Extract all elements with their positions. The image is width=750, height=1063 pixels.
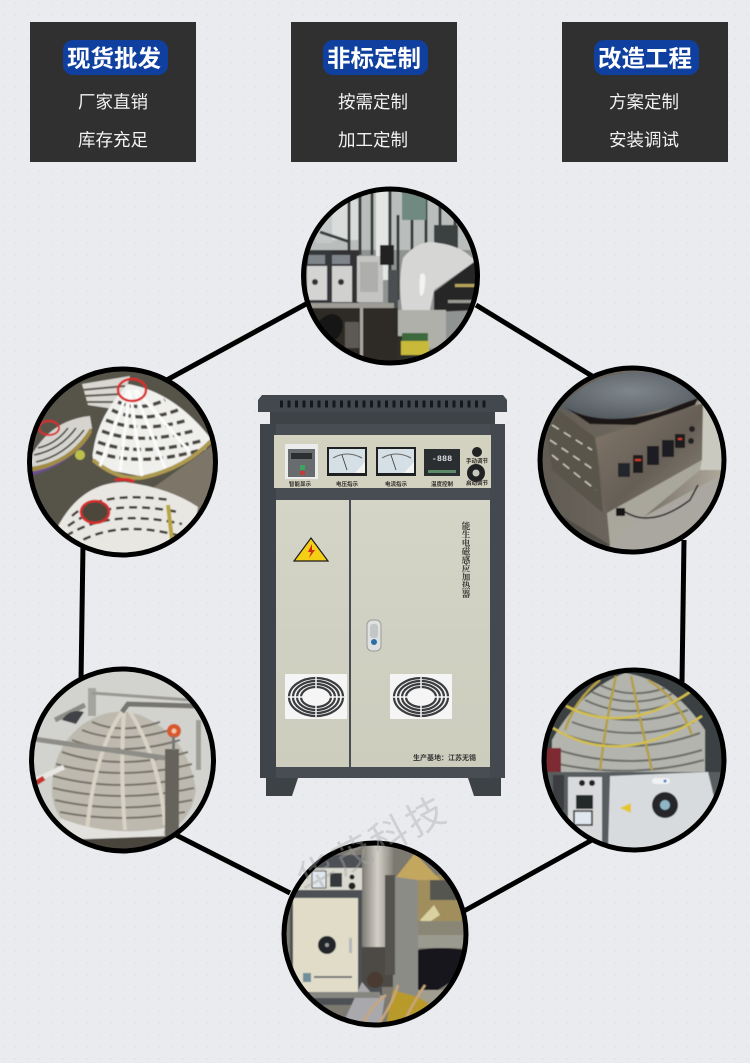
vertical product name: 应 (462, 562, 471, 574)
control panel (274, 435, 491, 488)
vertical product name: 能 (462, 520, 471, 532)
feature card: custom (291, 22, 457, 162)
wok (560, 372, 702, 420)
temperature controller: -888 (432, 454, 452, 464)
vertical product name: 器 (462, 588, 471, 600)
back dome (82, 376, 130, 410)
cabinet top cap with vents (258, 395, 507, 426)
photo circle: stainless heater box with wok (536, 366, 730, 556)
left door (276, 500, 349, 767)
voltmeter (327, 447, 367, 476)
door lock (367, 620, 381, 651)
central induction heater cabinet (258, 395, 507, 796)
hexagon connector lines (81, 304, 684, 911)
control labels: 电流指示 (385, 480, 407, 488)
control labels (289, 457, 488, 488)
cabinet (290, 855, 382, 1005)
photo circle: white coil domes (26, 368, 220, 560)
cabinet body and feet (260, 424, 505, 796)
vertical product name (462, 520, 472, 600)
dome (52, 712, 196, 838)
right door (351, 500, 490, 767)
text: 安装调试: 安装调试 (609, 130, 679, 150)
production base label: 生产基地：江苏无锡 (413, 753, 476, 762)
ammeter (376, 447, 416, 476)
box side (547, 410, 603, 513)
feature card: retrofit (562, 22, 728, 162)
vertical product name: 热 (462, 580, 472, 592)
vertical product name: 生 (462, 528, 471, 540)
vertical product name: 感 (462, 554, 471, 566)
cabinet (548, 772, 720, 844)
heading badge: 非标定制: 非标定制 (327, 46, 421, 72)
heading badge: 非标定制 (323, 40, 428, 75)
worker (367, 972, 383, 988)
control labels: 启动调节 (466, 479, 488, 487)
text: 厂家直销: 厂家直销 (78, 92, 148, 112)
dome (552, 673, 705, 772)
feature card: wholesale (30, 22, 196, 162)
temperature controller (424, 449, 460, 476)
left small dome (30, 416, 92, 470)
steel column (362, 845, 393, 947)
cabinets (306, 250, 334, 304)
watermark: 华茂科技 (291, 789, 455, 903)
main dome (93, 384, 212, 477)
knobs (467, 447, 485, 482)
heading badge: 现货批发 (63, 40, 168, 75)
vertical product name: 加 (462, 571, 471, 583)
control labels: 智能显示 (289, 480, 311, 488)
text: 库存充足: 库存充足 (78, 130, 148, 150)
front dome (56, 482, 198, 560)
photo circle: insulated coil dome on steel frame (28, 668, 218, 855)
control labels: 温度控制 (431, 480, 453, 488)
vertical product name: 磁 (462, 546, 471, 558)
steel frame (34, 739, 165, 758)
hood (400, 242, 474, 310)
box front (595, 403, 703, 513)
text: 按需定制: 按需定制 (338, 92, 408, 112)
warning triangle icon (294, 538, 328, 561)
photo circle: factory installation (300, 185, 482, 368)
yellow base (386, 990, 428, 1022)
heading badge: 改造工程 (594, 40, 699, 75)
heading badge: 现货批发: 现货批发 (67, 46, 161, 72)
photo circle: yellow-banded dome with control cabinet (540, 668, 735, 852)
digital controller (285, 444, 318, 479)
fan grille left (285, 674, 347, 719)
control labels: 电压指示 (336, 480, 358, 488)
text: 加工定制: 加工定制 (338, 130, 408, 150)
right panel (393, 877, 418, 997)
photo circle: cabinet beside reactor with worker (282, 840, 470, 1030)
text: 方案定制: 方案定制 (609, 92, 679, 112)
fan grille right (390, 674, 452, 719)
control labels: 手动调节 (466, 457, 488, 465)
vertical product name: 电 (462, 537, 471, 549)
heading badge: 改造工程: 改造工程 (598, 46, 692, 72)
